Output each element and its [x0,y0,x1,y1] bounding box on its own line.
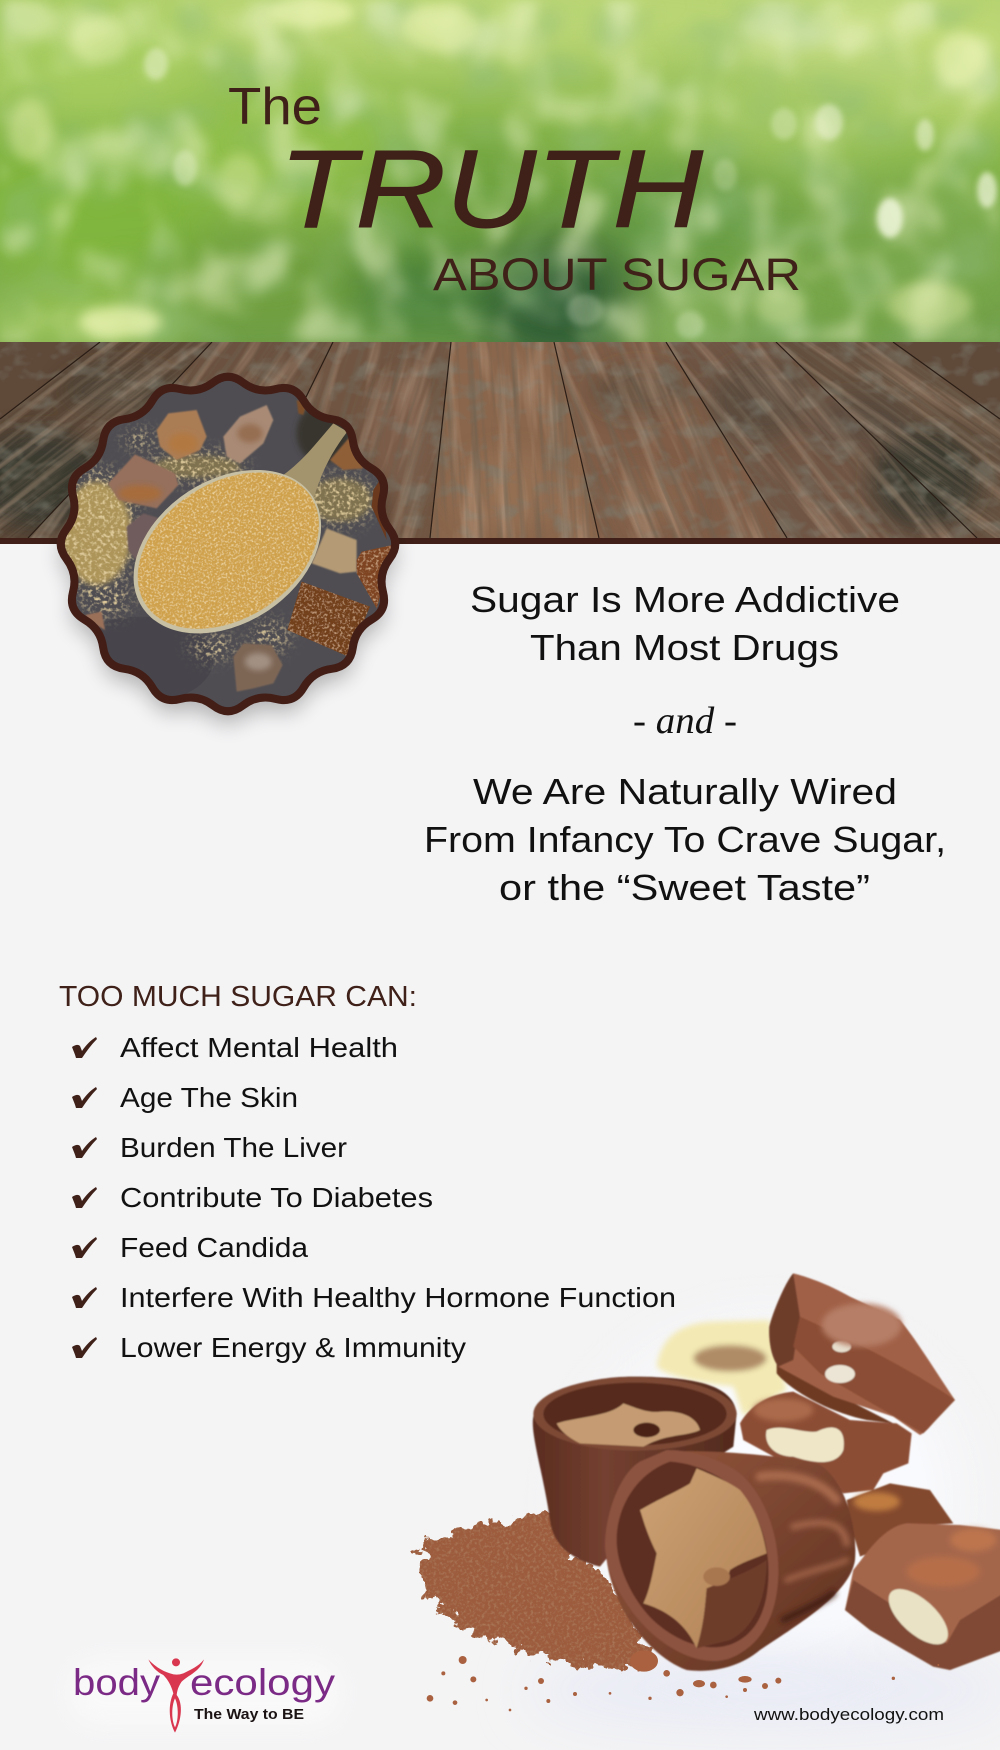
list heading: TOO MUCH SUGAR CAN: [59,981,417,1013]
badge photo [64,381,392,708]
crumbs [427,1650,939,1711]
list items: Affect Mental Health [120,1032,398,1063]
statement line 1: Sugar Is More Addictive [470,579,900,620]
title: About Sugar: ABOUT SUGAR [433,249,801,300]
logo glow [70,1660,340,1725]
list items: Lower Energy & Immunity [120,1332,466,1363]
top right chunk [777,1363,893,1423]
header title [228,78,801,300]
list items: Interfere With Healthy Hormone Function [120,1282,676,1313]
chocolates photo [417,1270,1000,1730]
check icons [72,1037,97,1358]
plank grain, sheared to follow the perspective [0,342,208,538]
website url: www.bodyecology.com [753,1705,944,1724]
intro statement text [424,579,946,908]
badge: spoon of brown sugar [40,360,420,730]
cocoa powder [417,1513,653,1670]
header photo: blurred green foliage [0,0,1000,370]
scattered sugar [53,430,377,660]
front chocolate cup [606,1451,855,1671]
crystal corner [330,437,363,470]
middle right chunk [847,1483,953,1557]
title: TRUTH: TRUTH [279,128,704,251]
white chocolate cup [657,1320,787,1417]
crystal: top middle [223,405,273,463]
back chocolate cup [533,1377,737,1567]
spoon sugar [138,472,319,629]
statement line 3: We Are Naturally Wired [473,771,897,812]
list items: Contribute To Diabetes [120,1182,433,1213]
spoon bowl [134,470,322,634]
statement line 5: or the “Sweet Taste” [499,867,870,908]
list items: Feed Candida [120,1232,308,1263]
logo word: ecology: ecology [190,1662,336,1703]
title: The: The [228,78,322,136]
sugar cube: right [357,545,393,608]
crystal: bottom [233,643,283,692]
nut chunk [740,1392,912,1493]
list items [120,1032,676,1363]
list items: Burden The Liver [120,1132,347,1163]
front right chunk [845,1523,1000,1670]
wooden table planks [0,342,1000,538]
nut [879,1579,957,1654]
front cup inside [617,1462,769,1647]
badge scalloped border [61,377,395,711]
crystal: right [312,528,357,573]
logo word: body: body [73,1662,161,1703]
spoon handle [283,423,347,500]
crystal: top left [157,410,207,460]
statement line 4: From Infancy To Crave Sugar, [424,819,946,860]
logo figure [148,1658,204,1733]
crystal: lower left [127,513,165,563]
list items: Age The Skin [120,1082,298,1113]
front cup filling [640,1468,767,1648]
soft highlights [753,1303,997,1620]
badge shadow [61,389,395,723]
logo tagline: The Way to BE [194,1706,304,1723]
sugar cube: front [287,582,370,657]
dark brown band under table [0,538,1000,544]
statement line 2: Than Most Drugs [530,627,839,668]
connector: and: - and - [633,700,737,742]
checklist [72,1032,676,1363]
logo: body ecology [70,1658,340,1733]
front cup rim [605,1450,778,1661]
crystal: left [108,454,178,508]
